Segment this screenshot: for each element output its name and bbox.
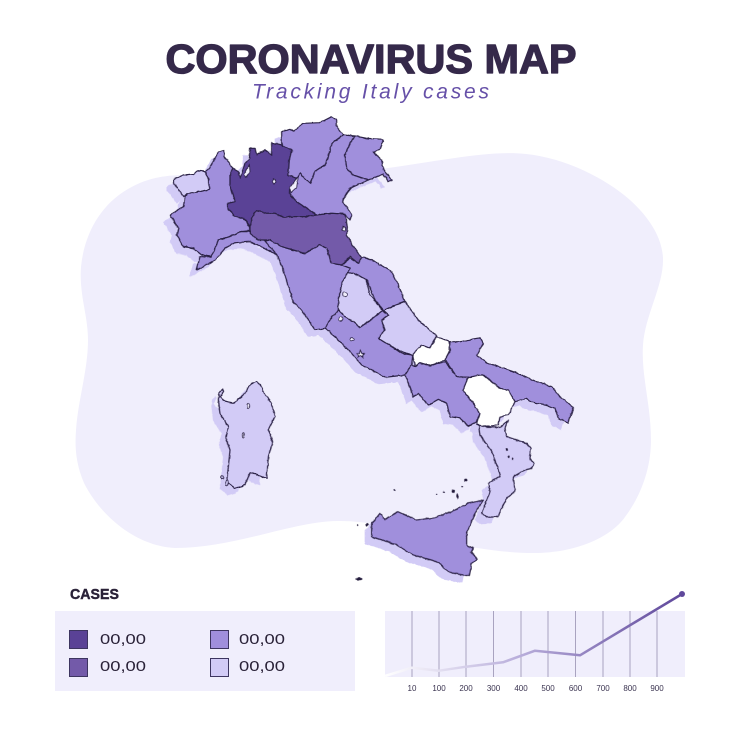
axis labels: 700 — [596, 684, 610, 693]
region: Liguria — [197, 232, 277, 270]
region: Sardinia — [218, 382, 275, 488]
lakes and small details — [221, 165, 364, 485]
axis labels: 400 — [514, 684, 528, 693]
small islands — [355, 449, 513, 580]
region: Puglia — [445, 338, 573, 423]
axis labels: 800 — [623, 684, 637, 693]
legend item: light — [210, 658, 285, 676]
legend item: dark: 00,00 — [100, 658, 146, 675]
end point — [679, 591, 685, 597]
axis labels: 300 — [487, 684, 501, 693]
legend item: medium: 00,00 — [239, 631, 285, 648]
map drop shadow — [163, 124, 566, 583]
axis labels — [408, 684, 664, 693]
axis labels: 10 — [408, 684, 417, 693]
region: Campania — [405, 362, 480, 426]
region: Trentino — [282, 117, 343, 183]
region: Sicily — [372, 500, 483, 576]
region: Aosta Valley — [174, 171, 209, 197]
legend item: darkest: 00,00 — [100, 631, 146, 648]
axis labels: 200 — [459, 684, 473, 693]
region: Emilia-Romagna — [250, 211, 363, 265]
title: CORONAVIRUS MAP — [166, 36, 576, 82]
background blob — [76, 153, 663, 553]
legend item: dark — [70, 658, 146, 676]
axis labels: 500 — [541, 684, 555, 693]
region: Molise — [413, 337, 449, 367]
trend line — [385, 594, 682, 676]
region: Umbria — [338, 273, 382, 327]
legend item: medium — [210, 630, 285, 648]
subtitle: Tracking Italy cases — [252, 80, 490, 104]
region: Lazio — [325, 310, 413, 377]
region: Basilicata — [463, 375, 515, 427]
axis labels: 100 — [432, 684, 446, 693]
region: Piedmont — [170, 150, 250, 257]
region: Abruzzo — [378, 302, 437, 355]
region: Calabria — [478, 420, 534, 517]
legend heading: CASES — [70, 587, 119, 603]
legend panel — [55, 611, 355, 691]
region: Veneto — [289, 135, 368, 220]
region: Tuscany — [265, 240, 351, 330]
legend item: darkest — [70, 630, 146, 648]
legend item: light: 00,00 — [239, 658, 285, 675]
line chart — [385, 591, 685, 693]
region: Lombardy — [227, 143, 317, 226]
map of Italy — [163, 117, 573, 583]
axis labels: 900 — [650, 684, 664, 693]
region: Friuli — [345, 136, 392, 182]
axis labels: 600 — [569, 684, 583, 693]
regions — [170, 117, 573, 580]
region: Marche — [342, 257, 405, 311]
